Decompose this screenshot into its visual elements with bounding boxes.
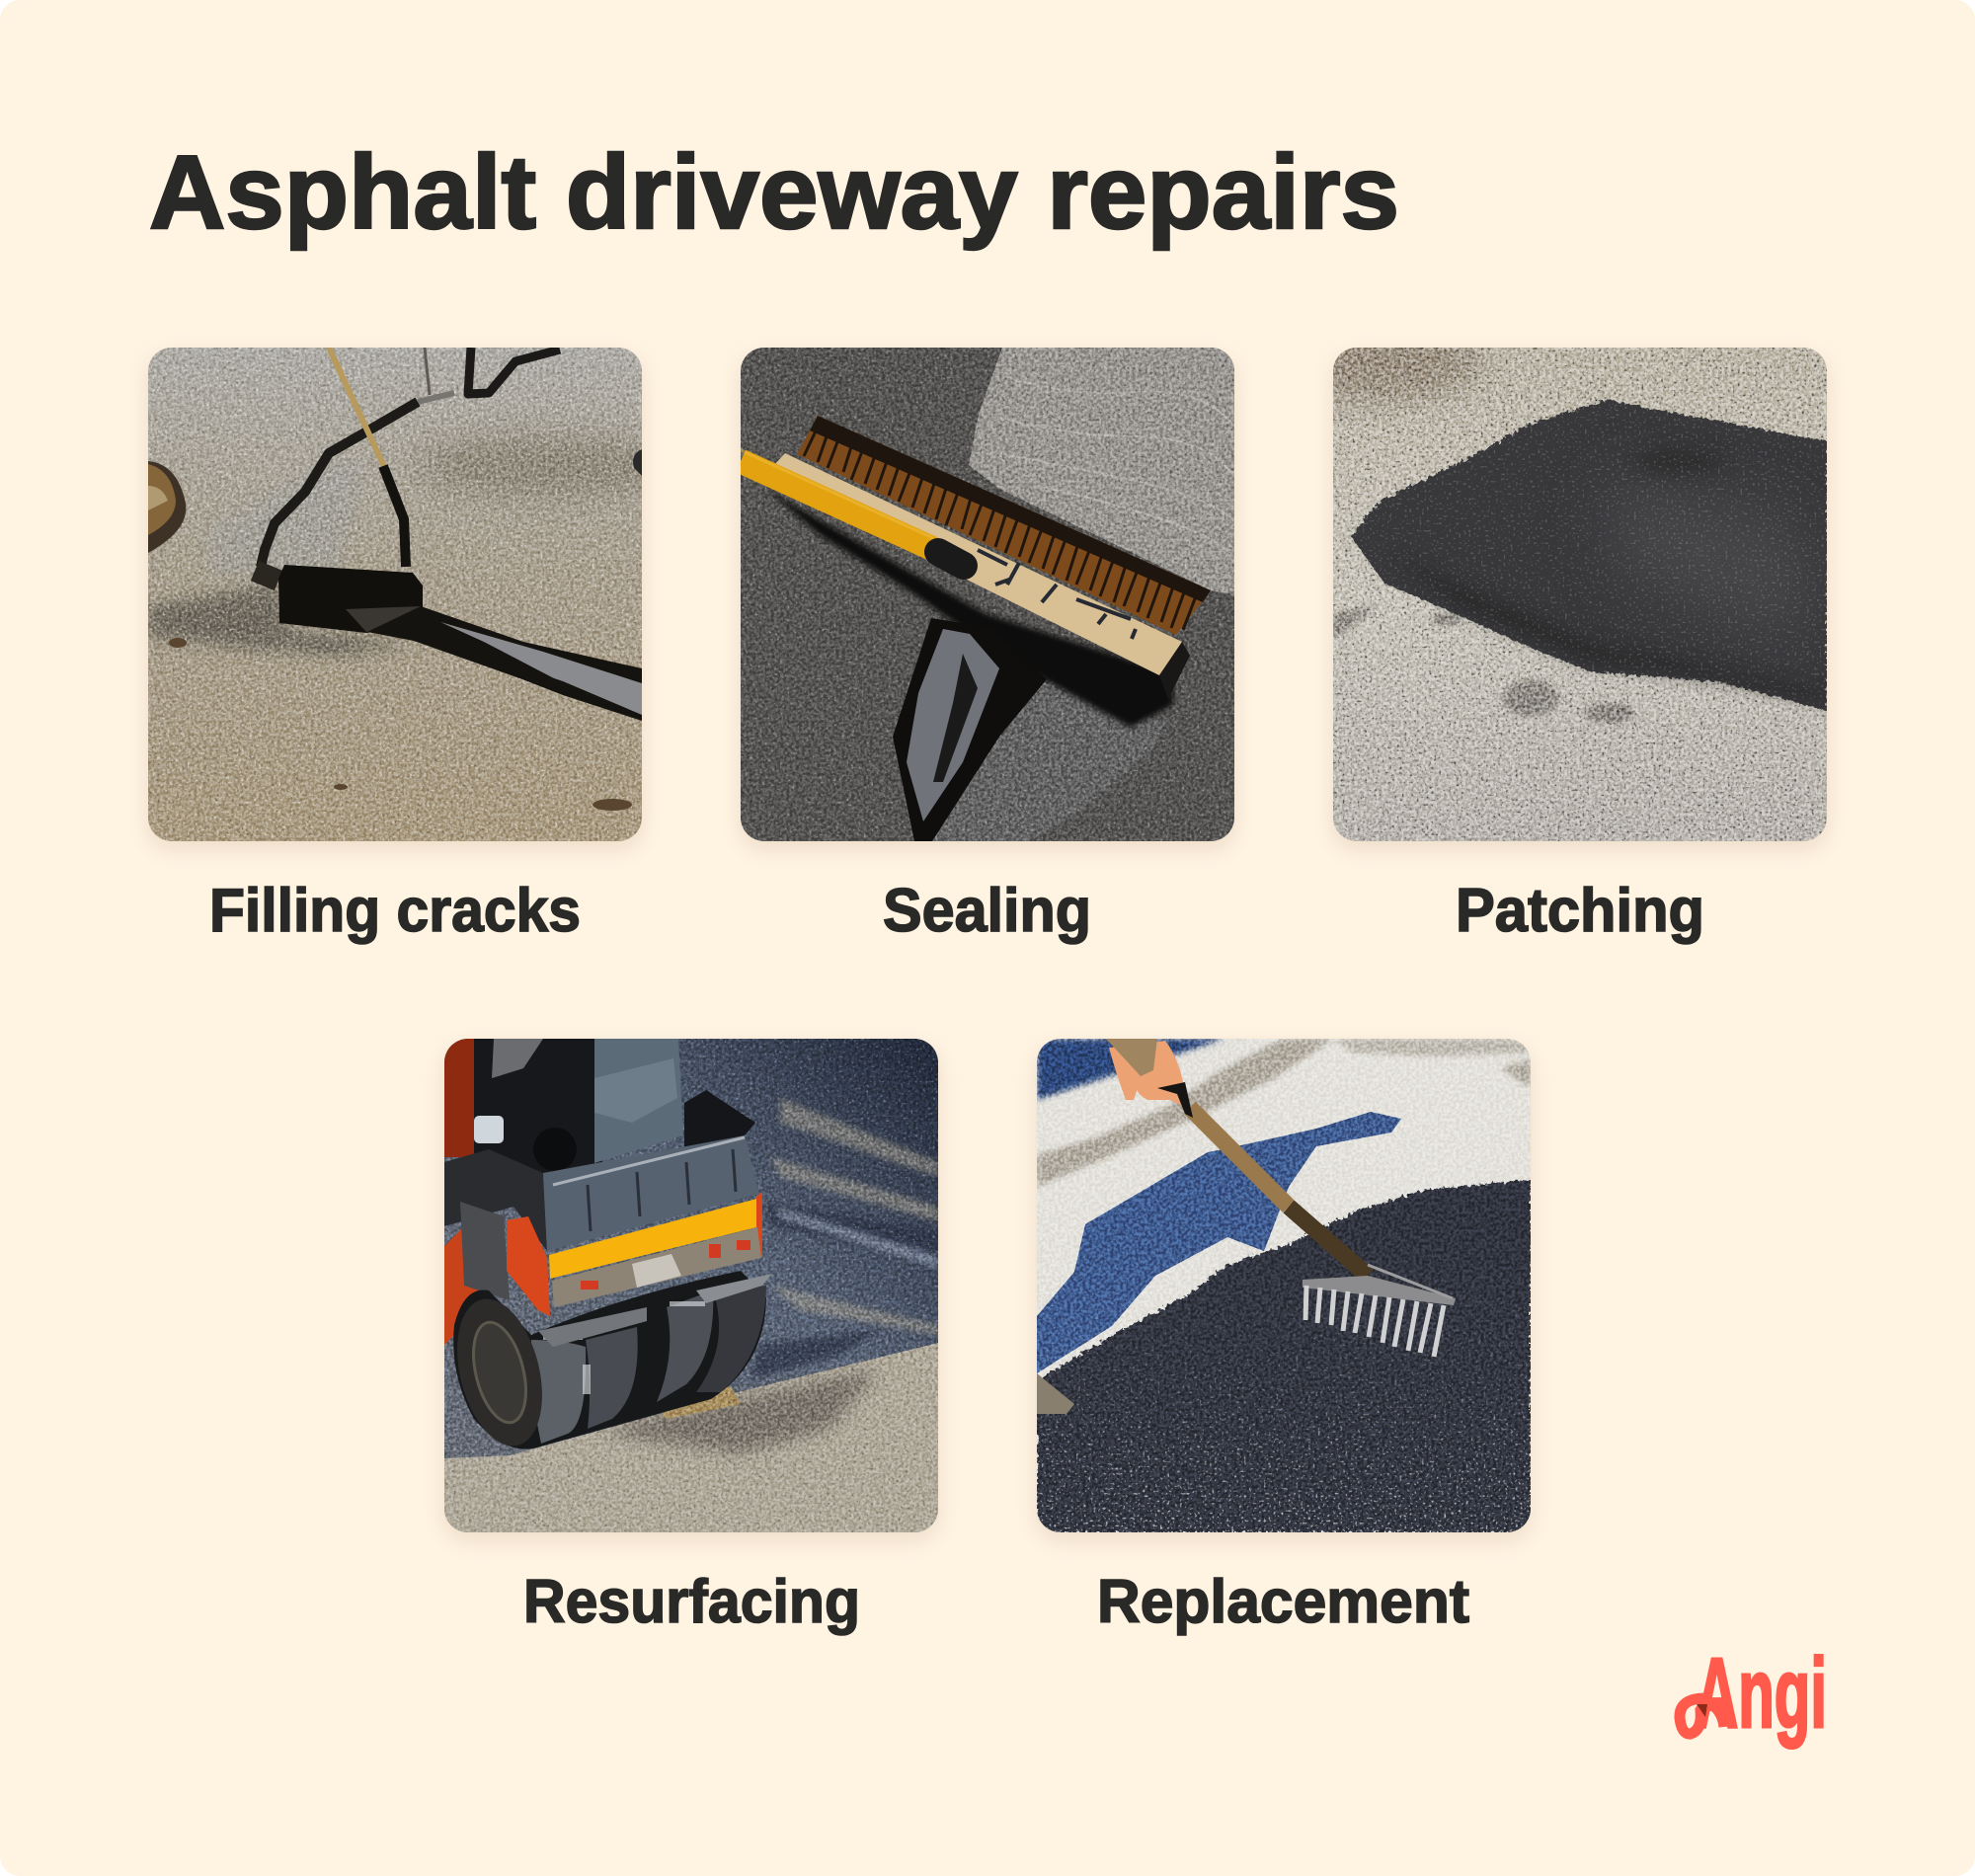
machine: [444, 1039, 504, 1157]
label: filling cracks: Filling cracks: [209, 877, 581, 945]
bristles: [797, 416, 1211, 635]
label: patching: Patching: [1456, 877, 1704, 945]
wood block: [762, 453, 1182, 675]
panel: filling cracks photo: [148, 348, 642, 841]
panel: replacement photo: [1037, 1039, 1531, 1532]
panel: sealing photo: [741, 348, 1234, 841]
rod: [329, 348, 387, 473]
handle: [741, 461, 933, 549]
asphalt patch: [1351, 400, 1827, 711]
logo: Angi: Angi: [1696, 1638, 1827, 1749]
shadow of worker: [1037, 1112, 1401, 1373]
boot left: [148, 461, 186, 553]
panel: resurfacing photo: [444, 1039, 938, 1532]
squeegee box: [278, 565, 423, 633]
drip: [893, 618, 1047, 841]
sealant strip: [367, 606, 642, 721]
wet patch: [928, 679, 1165, 841]
gravel: [1037, 1180, 1531, 1532]
label: resurfacing: Resurfacing: [523, 1568, 860, 1636]
panel: patching photo: [1333, 348, 1827, 841]
specks: [169, 638, 632, 811]
hand: [1109, 1041, 1187, 1108]
label: sealing: Sealing: [883, 877, 1091, 945]
thin rod and cable: [425, 348, 430, 395]
rake: [1303, 1276, 1456, 1305]
boot right: [633, 449, 642, 476]
label: replacement: Replacement: [1097, 1568, 1469, 1636]
title: Asphalt driveway repairs: [149, 134, 1399, 251]
boot: [1037, 1373, 1074, 1414]
shadow under broom: [765, 489, 1173, 728]
rollers: [453, 1271, 766, 1449]
handle: [1190, 1108, 1289, 1207]
